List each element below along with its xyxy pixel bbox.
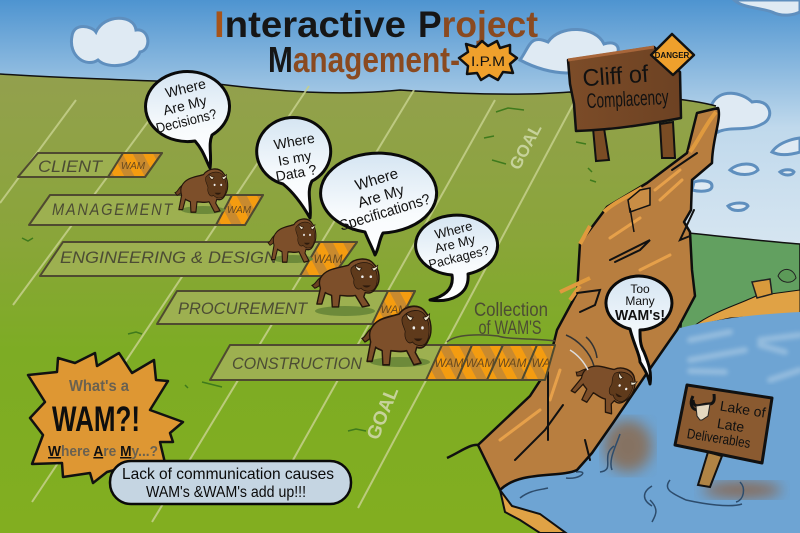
lane: management: WAM bbox=[227, 205, 252, 216]
speech bubble: too many WAMs: Many bbox=[625, 294, 655, 308]
speech bubble: too many WAMs bbox=[606, 276, 672, 384]
starburst: what's a WAM: WAM?! bbox=[52, 400, 140, 439]
speech bubble: too many WAMs: Too bbox=[630, 282, 650, 296]
collection of WAMs label bbox=[447, 300, 555, 342]
title bbox=[214, 4, 538, 80]
speech bubble: specifications: Where bbox=[353, 165, 400, 194]
lane: engineering and design: WAM bbox=[313, 252, 343, 266]
cliff of complacency sign: Cliff of bbox=[582, 61, 650, 92]
speech bubble: decisions: Where bbox=[164, 75, 208, 101]
lane: engineering and design: ENGINEERING & DESIGN bbox=[60, 248, 278, 267]
bison: falling off cliff bbox=[566, 335, 641, 419]
speech bubble: data: Data ? bbox=[274, 161, 318, 184]
starburst: what's a WAM bbox=[28, 353, 183, 483]
lower shore strip bbox=[500, 490, 566, 533]
lane: management: MANAGEMENT bbox=[52, 200, 174, 219]
cliff bbox=[447, 108, 719, 490]
speech bubble: packages bbox=[416, 215, 498, 301]
background sky bbox=[0, 0, 800, 320]
speech bubble: decisions: Are My bbox=[161, 92, 208, 118]
speech bubble: data: Is my bbox=[277, 147, 313, 169]
grass field bbox=[0, 74, 716, 533]
lane: client: WAM bbox=[121, 161, 146, 172]
cliff of complacency sign bbox=[568, 34, 694, 161]
lane: engineering and design bbox=[40, 242, 357, 276]
collection of WAMs label: Collection bbox=[474, 300, 548, 321]
lane: construction: CONSTRUCTION bbox=[232, 354, 363, 373]
skull icon bbox=[691, 394, 714, 420]
lane: construction: WAM bbox=[434, 356, 464, 370]
goal labels: GOAL bbox=[363, 384, 403, 443]
speech bubble: decisions bbox=[146, 72, 230, 168]
grass tufts bbox=[22, 108, 596, 431]
I.P.M. badge: I.P.M bbox=[471, 53, 505, 69]
lake of late deliverables sign: Late bbox=[716, 415, 746, 435]
callout: lack of communication: WAM's &WAM's add up!!! bbox=[146, 484, 306, 501]
I.P.M. badge bbox=[459, 41, 517, 80]
bison: procurement lane bbox=[312, 259, 379, 316]
speech bubble: packages: Are My bbox=[433, 231, 477, 256]
lane: client: CLIENT bbox=[38, 157, 104, 176]
lake of late deliverables sign: Deliverables bbox=[686, 425, 752, 451]
speech bubble: too many WAMs: WAM's! bbox=[615, 307, 665, 324]
starburst: what's a WAM: What's a bbox=[69, 378, 129, 395]
callout: lack of communication bbox=[110, 461, 351, 504]
bison: client lane bbox=[175, 169, 228, 214]
right hill bbox=[680, 233, 800, 340]
callout: lack of communication: Lack of communication causes bbox=[122, 466, 334, 483]
lane: construction bbox=[210, 345, 555, 380]
speech bubble: specifications bbox=[321, 153, 437, 255]
speech bubble: packages: Packages? bbox=[427, 242, 491, 272]
far shore with rocks bbox=[694, 269, 800, 326]
speech bubble: data bbox=[257, 117, 331, 218]
title: Management- bbox=[268, 39, 460, 80]
lane: construction: WAM bbox=[465, 356, 495, 370]
lane: construction: WAM bbox=[497, 356, 527, 370]
speech bubble: packages: Where bbox=[433, 218, 474, 242]
speech bubble: data: Where bbox=[272, 130, 316, 153]
goal labels bbox=[363, 121, 546, 443]
clouds bbox=[71, 0, 800, 210]
goal labels: GOAL bbox=[506, 121, 546, 173]
bison: engineering lane bbox=[268, 219, 316, 263]
bison: construction lane bbox=[362, 306, 431, 367]
title: Interactive bbox=[214, 4, 406, 45]
starburst: what's a WAM: Where Are My...? bbox=[48, 443, 158, 460]
lane: management bbox=[29, 195, 263, 225]
speech bubble: specifications: Are My bbox=[356, 181, 407, 212]
yard lines bbox=[0, 85, 578, 522]
cliff of complacency sign: Complacency bbox=[586, 86, 670, 113]
lake of late deliverables sign bbox=[675, 385, 772, 487]
lane: procurement: PROCUREMENT bbox=[178, 299, 309, 318]
lane: procurement: WAM bbox=[381, 304, 408, 316]
lake of late deliverables bbox=[500, 312, 800, 533]
speech bubble: decisions: Decisions? bbox=[154, 105, 218, 136]
lake of late deliverables sign: Lake of bbox=[719, 398, 767, 421]
lane: procurement bbox=[157, 291, 415, 324]
speech bubble: specifications: Specifications? bbox=[338, 191, 432, 235]
lane: client bbox=[18, 153, 162, 177]
lane: construction: WA bbox=[531, 356, 551, 370]
collection of WAMs label: of WAM'S bbox=[478, 318, 542, 339]
title: Project bbox=[418, 4, 538, 45]
danger diamond: DANGER bbox=[655, 51, 690, 60]
